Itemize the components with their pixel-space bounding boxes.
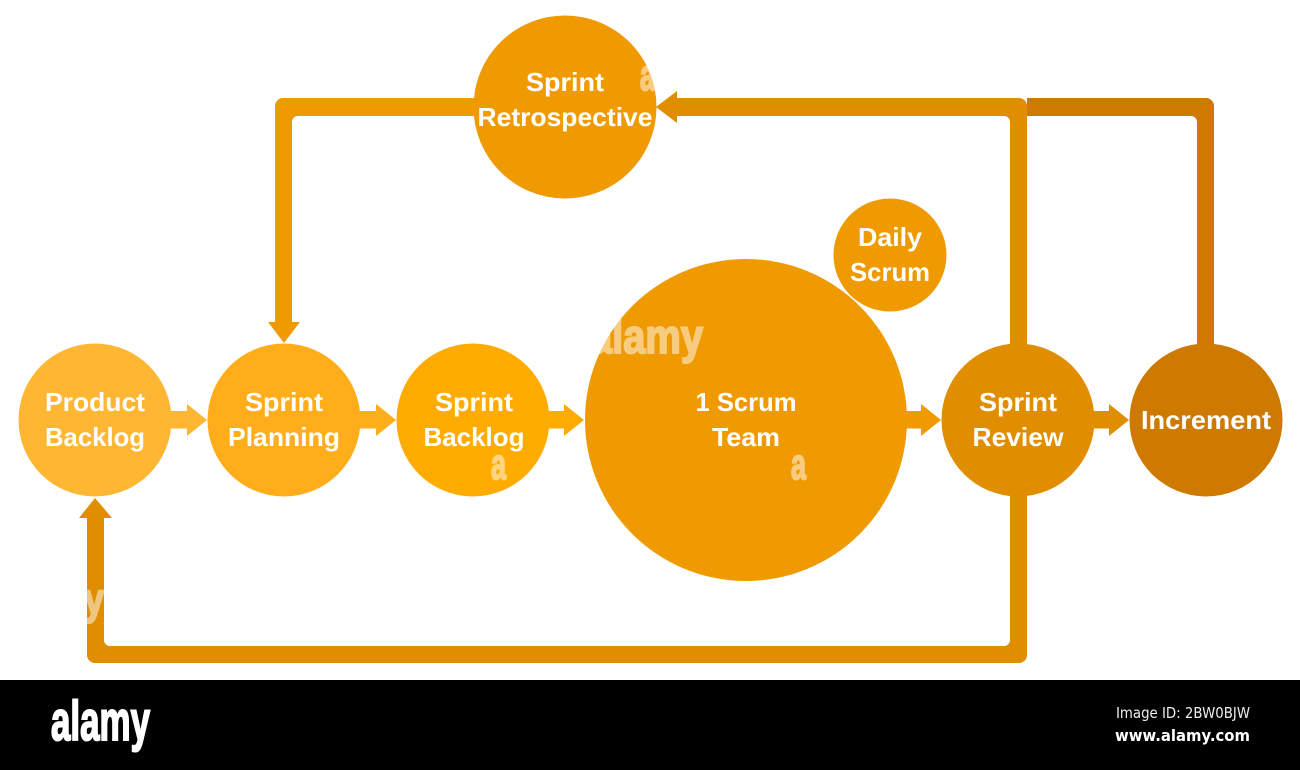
footer image id: Image ID: 2BW0BJW bbox=[1116, 704, 1250, 722]
arrow: scrum team to sprint review bbox=[903, 404, 941, 436]
footer logo: alamy: alamy bbox=[51, 689, 150, 752]
arrow: increment to sprint retrospective loop bbox=[1027, 98, 1214, 350]
node: scrum team: Team bbox=[712, 422, 780, 452]
node: sprint retrospective bbox=[474, 16, 656, 198]
watermark: letter y on feedback arrow: y bbox=[84, 575, 104, 624]
watermark: alamy center: alamy bbox=[590, 311, 703, 364]
node: product backlog: Backlog bbox=[45, 422, 145, 452]
node: sprint backlog bbox=[396, 344, 550, 496]
node: sprint retrospective: Sprint bbox=[526, 67, 604, 97]
node: sprint review: Sprint bbox=[979, 387, 1057, 417]
arrow: sprint planning to sprint backlog bbox=[357, 404, 396, 436]
node: sprint planning: Sprint bbox=[245, 387, 323, 417]
node: daily scrum: Scrum bbox=[850, 257, 930, 287]
node: increment bbox=[1130, 344, 1282, 496]
node: sprint retrospective: Retrospective bbox=[478, 102, 652, 132]
arrow: sprint review to sprint retrospective bbox=[656, 91, 1027, 350]
node: scrum team: 1 Scrum bbox=[696, 387, 796, 417]
node: product backlog bbox=[18, 344, 172, 496]
arrow: sprint retrospective to sprint planning bbox=[268, 98, 480, 343]
arrow: sprint backlog to scrum team bbox=[545, 404, 584, 436]
node: sprint backlog: Sprint bbox=[435, 387, 513, 417]
node: sprint review bbox=[942, 344, 1094, 496]
node: sprint review: Review bbox=[972, 422, 1064, 452]
node: sprint backlog: Backlog bbox=[424, 422, 524, 452]
arrow: sprint review back to product backlog bbox=[79, 490, 1027, 663]
node: daily scrum: Daily bbox=[858, 222, 923, 252]
watermark: letter a on sprint retrospective: a bbox=[640, 51, 655, 100]
node: scrum team bbox=[585, 259, 907, 581]
arrow: product backlog to sprint planning bbox=[168, 404, 207, 436]
watermark: letter a on sprint backlog: a bbox=[491, 440, 506, 489]
node: daily scrum bbox=[834, 198, 946, 312]
node: sprint planning bbox=[208, 344, 360, 496]
arrow: sprint review to increment bbox=[1091, 404, 1129, 436]
node: increment: Increment bbox=[1141, 405, 1271, 435]
node: product backlog: Product bbox=[45, 387, 145, 417]
footer website: www.alamy.com bbox=[1115, 726, 1250, 745]
footer bar bbox=[0, 680, 1300, 770]
watermark: letter a on scrum team: a bbox=[791, 440, 806, 489]
node: sprint planning: Planning bbox=[228, 422, 340, 452]
